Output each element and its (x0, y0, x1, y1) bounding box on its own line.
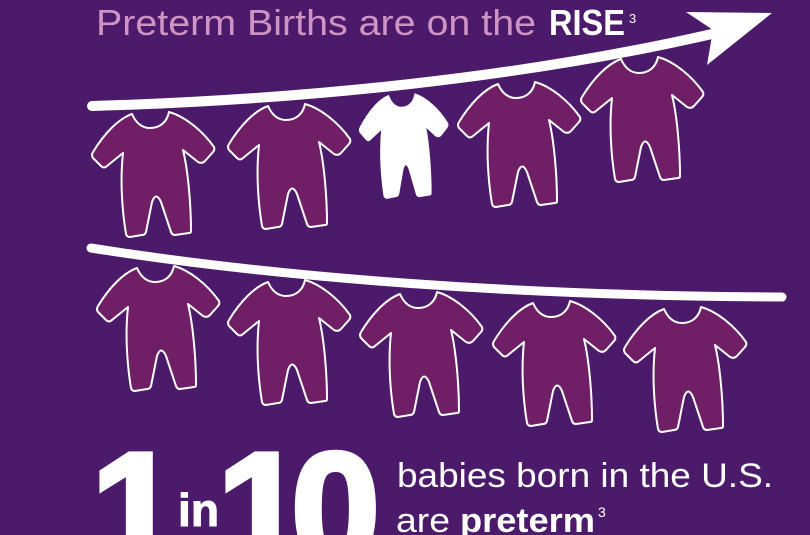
onesie 8 (360, 292, 482, 417)
onesie 7 (228, 280, 350, 405)
white onesie (360, 94, 448, 198)
onesie 5 (581, 57, 703, 182)
onesie 1 (92, 112, 214, 237)
onesie 6 (97, 266, 219, 391)
onesie 9 (493, 301, 615, 426)
title: Preterm Births are on the (96, 2, 536, 43)
onesie 2 (228, 104, 350, 229)
statistic: 1 in 10: in (178, 484, 219, 535)
statistic description: babies born in the U.S. (397, 457, 773, 495)
onesie 4 (458, 82, 580, 207)
rising arrow (92, 12, 772, 106)
statistic description (396, 457, 773, 535)
statistic description: 3 (598, 504, 606, 520)
title: RISE (549, 2, 625, 43)
statistic: 1 in 10 (91, 419, 380, 535)
onesie 10 (624, 307, 746, 432)
top clothesline: five onesies, one white (92, 57, 703, 237)
bottom row of onesies (97, 266, 746, 432)
title: 3 (629, 11, 636, 26)
lower clothesline (91, 248, 782, 297)
